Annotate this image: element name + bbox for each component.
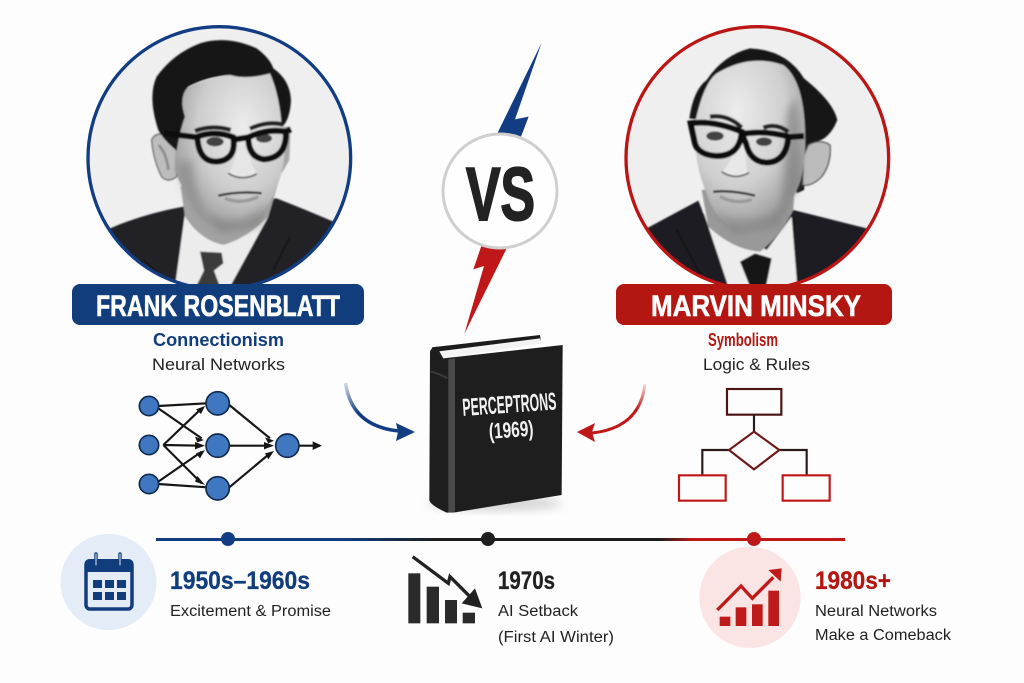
period: 1970s: (First AI Winter) <box>498 629 614 646</box>
period: 1980s+: Make a Comeback <box>815 627 951 644</box>
flowchart diagram <box>679 389 830 501</box>
name badge: Marvin Minsky <box>616 284 892 325</box>
book title: PERCEPTRONS <box>462 388 557 422</box>
period: 1970s: 1970s <box>498 567 555 595</box>
period: 1980s+ <box>815 567 951 644</box>
icon: declining bars <box>408 557 482 623</box>
right school of thought: Logic & Rules <box>703 355 810 374</box>
book title: (1969) <box>488 416 534 444</box>
left school of thought: Neural Networks <box>152 355 285 374</box>
name badge: Frank Rosenblatt <box>72 284 364 325</box>
VS badge <box>443 134 557 248</box>
period: 1970s <box>498 567 614 646</box>
portrait: Frank Rosenblatt <box>88 27 360 297</box>
right school of thought: Symbolism <box>708 330 778 350</box>
period: 1980s+: 1980s+ <box>815 567 891 595</box>
VS badge: VS <box>466 152 535 236</box>
period: 1980s+: Neural Networks <box>815 603 937 620</box>
name badge: Marvin Minsky: MARVIN MINSKY <box>651 290 861 323</box>
left school of thought: Connectionism <box>153 330 284 350</box>
period: 1950s-1960s <box>170 567 331 620</box>
period: 1950s-1960s: Excitement & Promise <box>170 603 331 620</box>
icon: rising bars <box>699 547 801 648</box>
left school of thought <box>152 330 285 374</box>
neural network diagram <box>139 392 322 500</box>
arrow: Minsky to book <box>577 384 645 442</box>
name badge: Frank Rosenblatt: FRANK ROSENBLATT <box>96 290 340 323</box>
book title <box>462 388 559 446</box>
period: 1950s-1960s: 1950s–1960s <box>170 567 310 595</box>
portrait: Marvin Minsky <box>626 27 889 297</box>
lightning bolts <box>464 43 542 334</box>
right school of thought <box>703 330 810 374</box>
arrow: Rosenblatt to book <box>346 383 415 441</box>
timeline <box>156 532 845 546</box>
period: 1970s: AI Setback <box>498 603 578 620</box>
book: Perceptrons <box>428 335 563 513</box>
icon: calendar <box>60 534 156 630</box>
